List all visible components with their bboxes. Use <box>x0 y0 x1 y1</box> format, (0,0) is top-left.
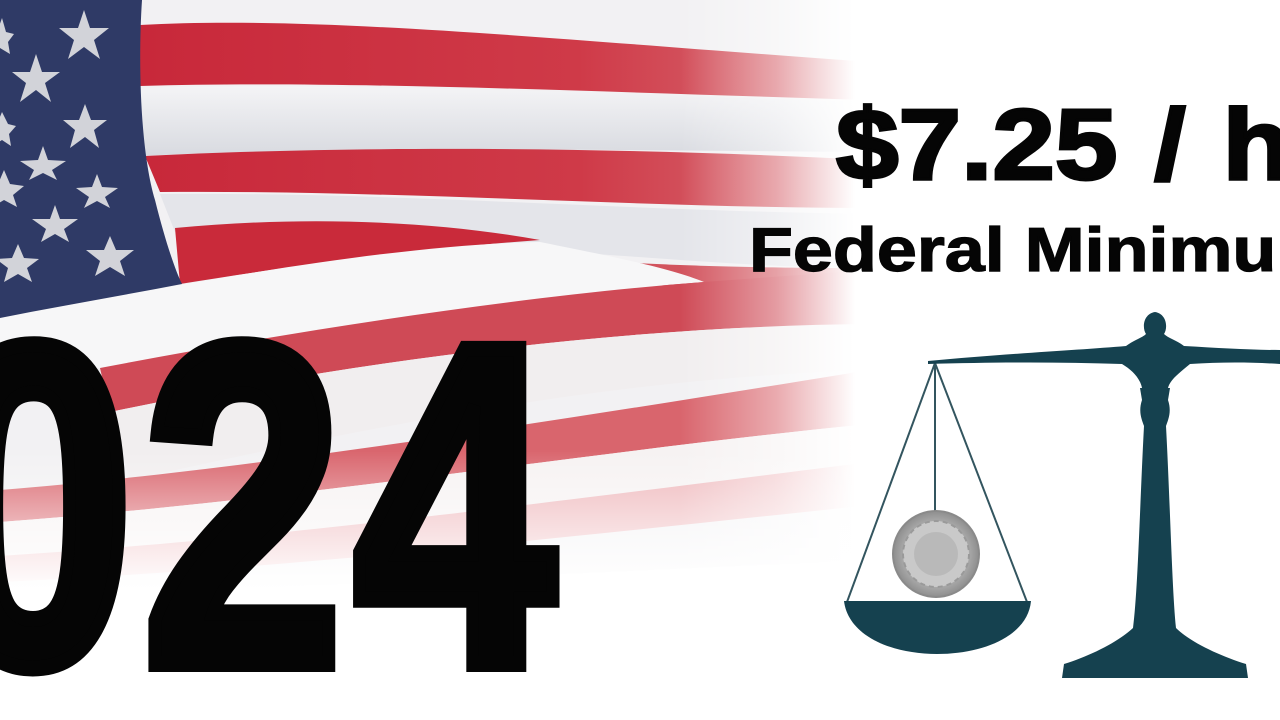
scale beam <box>928 312 1280 388</box>
scale pillar and base <box>1062 388 1248 678</box>
scale left strings <box>847 363 1027 602</box>
flag stripes <box>0 0 870 600</box>
american flag <box>0 0 880 620</box>
flag canton <box>0 0 182 318</box>
flag bottom fade <box>0 450 855 590</box>
canton stars <box>0 10 134 282</box>
scale pan <box>844 601 1031 654</box>
flag right fade <box>680 0 855 620</box>
coin on the pan <box>893 511 979 597</box>
balance scale <box>844 312 1280 678</box>
